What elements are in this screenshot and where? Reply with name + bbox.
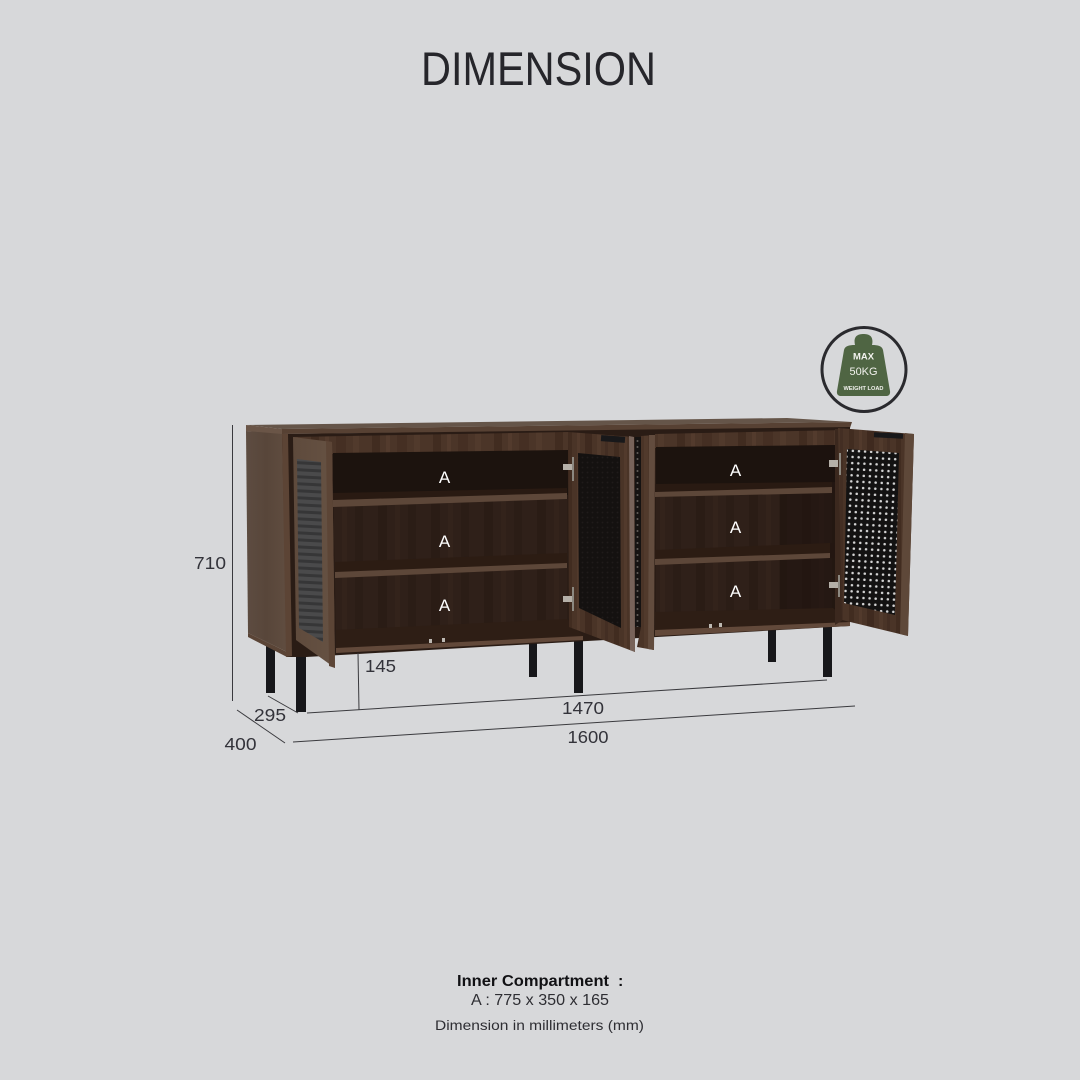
- shelf 2: [655, 543, 830, 565]
- dimension numbers: 710: [194, 553, 226, 573]
- compartment labels A: A: [730, 518, 742, 537]
- compartment labels A: A: [730, 582, 742, 601]
- compartment labels A: [439, 461, 742, 615]
- cabinet side panel: [246, 431, 287, 652]
- dimension numbers: 295: [254, 705, 286, 725]
- badge text: [844, 352, 884, 392]
- sideboard illustration: [246, 418, 914, 712]
- floor: [655, 608, 850, 636]
- compartment labels A: A: [730, 461, 742, 480]
- footer notes: Inner Compartment: [457, 973, 610, 990]
- weight load badge: [822, 328, 906, 412]
- dimension numbers: 400: [224, 734, 257, 754]
- compartment labels A: A: [439, 596, 451, 615]
- carcass left frame: [282, 434, 292, 657]
- badge text: MAX: [853, 352, 874, 362]
- floor: [336, 619, 583, 653]
- dimension numbers: 1470: [562, 698, 604, 718]
- cabinet top board: [246, 418, 852, 434]
- dimension lines: [232, 425, 855, 743]
- compartment labels A: A: [439, 532, 451, 551]
- dimension numbers: 145: [365, 656, 396, 676]
- footer notes: :: [618, 973, 623, 990]
- door: far left: [293, 437, 335, 668]
- footer notes: A : 775 x 350 x 165: [471, 992, 609, 1009]
- compartment labels A: A: [439, 468, 451, 487]
- dimension numbers: 1600: [568, 727, 609, 747]
- title: DIMENSION: [421, 42, 656, 95]
- hinges: [563, 453, 841, 611]
- badge text: 50KG: [850, 366, 878, 378]
- badge text: WEIGHT LOAD: [844, 386, 884, 392]
- shelf 1: [655, 482, 832, 497]
- icon: weight: [837, 334, 890, 396]
- right compartment: [655, 430, 850, 636]
- shelf 1: [333, 488, 567, 507]
- carcass front: [282, 427, 850, 657]
- left compartment: [293, 432, 583, 653]
- door: centre right: [635, 435, 655, 650]
- shelf 2: [335, 553, 567, 578]
- footer notes: Dimension in millimeters (mm): [435, 1018, 644, 1033]
- door: far right: [835, 428, 914, 636]
- door: centre left: [568, 432, 635, 652]
- legs: [266, 625, 832, 712]
- footer notes: [435, 973, 644, 1033]
- dimension numbers: [194, 553, 609, 754]
